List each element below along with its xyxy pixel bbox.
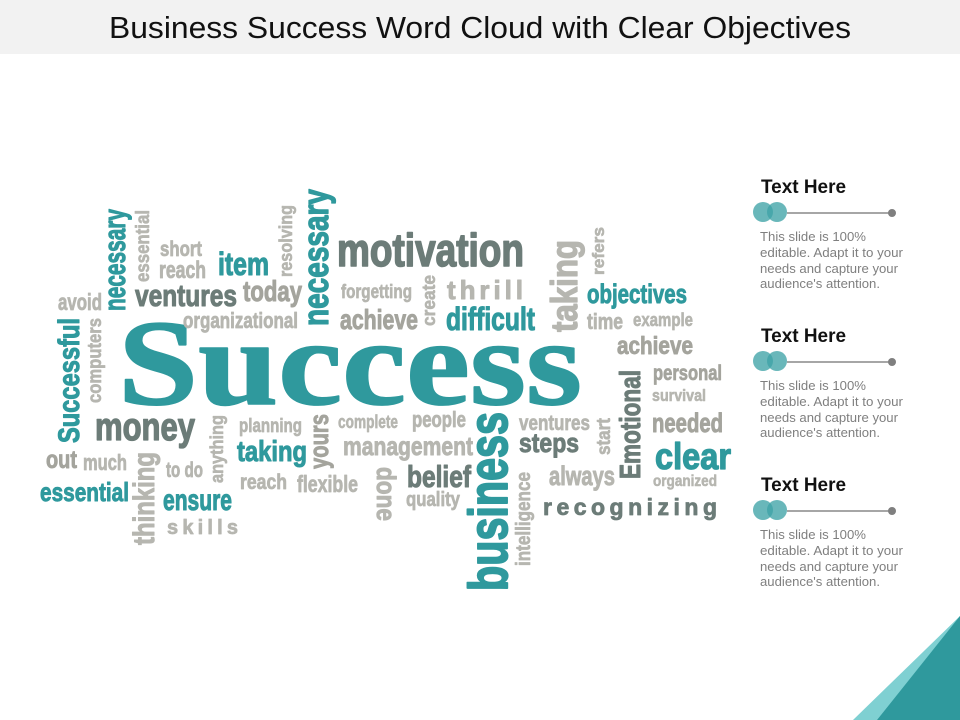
word: complete: complete: [338, 412, 398, 432]
description: [760, 527, 904, 589]
word: taking (vertical): taking: [544, 240, 585, 332]
word: money: money: [95, 406, 195, 449]
word: steps: steps: [519, 428, 579, 458]
word: necessary (large vertical): necessary: [295, 189, 336, 326]
word: intelligence (vertical): intelligence: [513, 472, 535, 566]
word: Emotional (vertical): Emotional: [615, 370, 647, 479]
sidebar item 3: [753, 474, 904, 589]
word: clear: clear: [655, 436, 731, 477]
word: yours (vertical): yours: [304, 414, 334, 469]
title bar: Business Success Word Cloud with Clear Objectives: [109, 10, 851, 45]
word: taking: taking: [237, 436, 307, 468]
word cloud: [40, 189, 731, 591]
word: organizational: organizational: [183, 308, 298, 333]
word: anything (vertical): anything: [207, 415, 227, 483]
word: short: short: [160, 238, 202, 261]
word: personal: personal: [653, 362, 722, 385]
word: quality: quality: [406, 489, 461, 511]
word: done (rotated clockwise): done: [371, 467, 401, 521]
description: needs and capture your: [760, 410, 899, 425]
word: difficult: difficult: [446, 301, 535, 337]
word: ventures: ventures: [135, 278, 237, 313]
word: planning: planning: [239, 416, 302, 437]
word: recognizing: recognizing: [543, 494, 717, 520]
word: ensure: ensure: [163, 484, 232, 517]
heading: Text Here: [761, 176, 846, 198]
description: This slide is 100%: [760, 229, 866, 244]
description: needs and capture your: [760, 261, 899, 276]
description: [760, 229, 904, 291]
word: essential: essential: [40, 477, 129, 507]
description: editable. Adapt it to your: [760, 543, 904, 558]
word: create (vertical): create: [419, 275, 439, 326]
word: resolving (vertical): resolving: [276, 205, 296, 277]
word: necessary (vertical): necessary: [97, 208, 132, 311]
word: forgetting: forgetting: [341, 282, 412, 303]
word: thinking (vertical): thinking: [128, 452, 161, 545]
description: audience's attention.: [760, 276, 880, 291]
description: editable. Adapt it to your: [760, 245, 904, 260]
word: Success: Success: [118, 296, 582, 431]
description: This slide is 100%: [760, 378, 866, 393]
title bar: [0, 0, 960, 54]
description: editable. Adapt it to your: [760, 394, 904, 409]
word: organized: organized: [653, 473, 717, 490]
icon: overlapping circles with connector line: [753, 202, 896, 222]
description: audience's attention.: [760, 574, 880, 589]
word: item: item: [218, 246, 269, 282]
description: audience's attention.: [760, 425, 880, 440]
heading: Text Here: [761, 474, 846, 496]
word: computers (vertical): computers: [85, 318, 106, 403]
word: business (large vertical): business: [457, 412, 519, 591]
word: today: today: [243, 276, 302, 308]
word: example: example: [633, 310, 693, 330]
word: ventures: ventures: [519, 412, 590, 435]
sidebar item 2: [753, 325, 904, 440]
icon: overlapping circles with connector line: [753, 351, 896, 371]
word: always: always: [549, 461, 615, 491]
word: thrill: thrill: [447, 275, 523, 305]
description: needs and capture your: [760, 559, 899, 574]
corner decoration triangles: [853, 616, 960, 720]
sidebar item 1: [753, 176, 904, 291]
word: flexible: flexible: [297, 471, 358, 497]
word: belief: belief: [407, 459, 472, 494]
word: achieve: achieve: [340, 304, 418, 335]
word: refers (vertical): refers: [589, 227, 608, 275]
description: [760, 378, 904, 440]
word: management: management: [343, 431, 473, 461]
word: to do: to do: [166, 459, 203, 482]
word: needed: needed: [652, 408, 723, 438]
word: reach: reach: [240, 471, 287, 494]
word: skills: skills: [167, 517, 238, 539]
word: start (vertical): start: [594, 417, 615, 455]
description: This slide is 100%: [760, 527, 866, 542]
icon: overlapping circles with connector line: [753, 500, 896, 520]
word: much: much: [83, 450, 127, 475]
word: motivation: motivation: [337, 224, 524, 276]
word: time: time: [587, 309, 623, 334]
word: survival: survival: [652, 386, 706, 405]
word: objectives: objectives: [587, 279, 687, 309]
word: out: out: [46, 446, 78, 474]
word: people: people: [412, 407, 466, 432]
word: Successful (vertical): Successful: [53, 318, 86, 443]
word: achieve: achieve: [617, 332, 693, 360]
word: essential (vertical): essential: [133, 210, 154, 282]
heading: Text Here: [761, 325, 846, 347]
word: reach: reach: [159, 257, 206, 284]
word: avoid: avoid: [58, 289, 102, 315]
